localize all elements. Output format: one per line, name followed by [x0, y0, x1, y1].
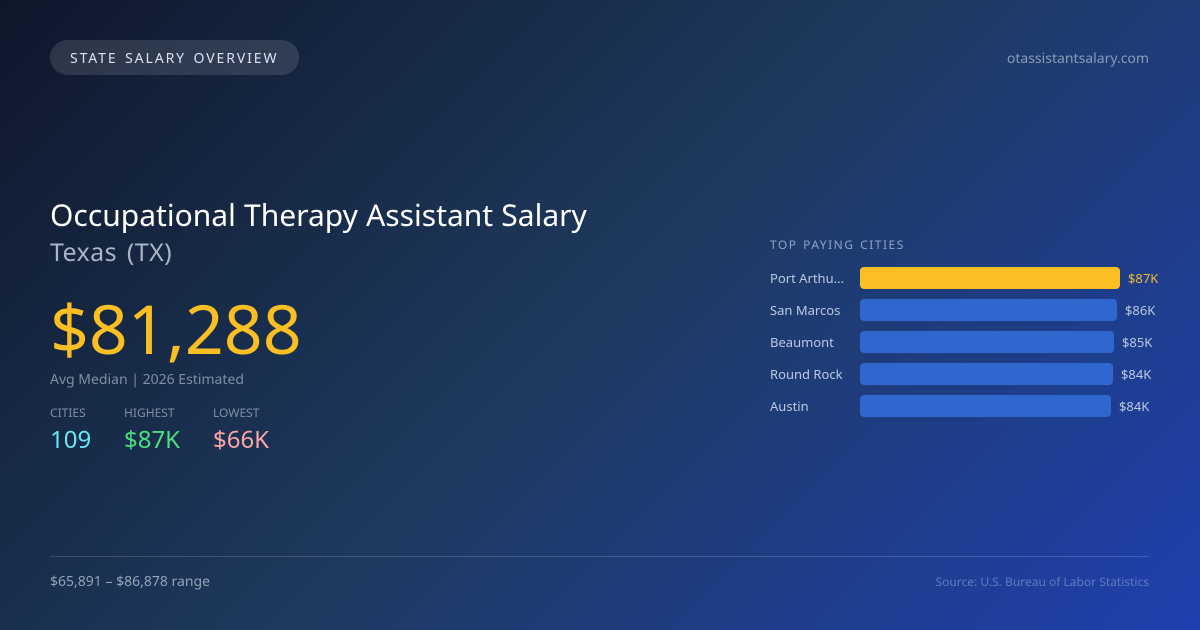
stat: cities: CITIES [50, 404, 86, 421]
row: Port Arthur: Port Arthu... [770, 269, 844, 287]
stat: highest [124, 404, 180, 456]
stat: lowest: $66K [213, 423, 269, 456]
stat: cities: 109 [50, 423, 91, 456]
stat: lowest [213, 404, 269, 456]
value: Round Rock: $84K [1121, 365, 1151, 383]
bar: Round Rock [860, 363, 1113, 385]
bar: Austin [860, 395, 1111, 417]
badge: state salary overview [50, 40, 299, 75]
stat: lowest: LOWEST [213, 404, 259, 421]
stat: highest: HIGHEST [124, 404, 175, 421]
row: Austin: Austin [770, 397, 809, 415]
footer rule [50, 556, 1149, 557]
value: Austin: $84K [1119, 397, 1149, 415]
badge: state salary overview: STATE SALARY OVERVIEW [70, 49, 278, 68]
range text: $65,891 – $86,878 range [50, 572, 210, 591]
site url: otassistantsalary.com [1007, 49, 1149, 68]
title: Occupational Therapy Assistant Salary [50, 194, 587, 235]
stat: cities [50, 404, 91, 456]
row: Beaumont: Beaumont [770, 333, 834, 351]
source text: Source: U.S. Bureau of Labor Statistics [936, 573, 1149, 590]
row: San Marcos: San Marcos [770, 301, 840, 319]
chart heading: TOP PAYING CITIES [770, 236, 905, 253]
value: San Marcos: $86K [1125, 301, 1155, 319]
salary caption: Avg Median | 2026 Estimated [50, 370, 244, 389]
subtitle: Texas (TX) [50, 235, 172, 269]
stat: highest: $87K [124, 423, 180, 456]
bar: San Marcos [860, 299, 1117, 321]
bar: Port Arthur [860, 267, 1120, 289]
value: Port Arthur: $87K [1128, 269, 1158, 287]
value: Beaumont: $85K [1122, 333, 1152, 351]
headline salary: $81,288 [50, 281, 302, 374]
row: Round Rock: Round Rock [770, 365, 843, 383]
bar: Beaumont [860, 331, 1114, 353]
